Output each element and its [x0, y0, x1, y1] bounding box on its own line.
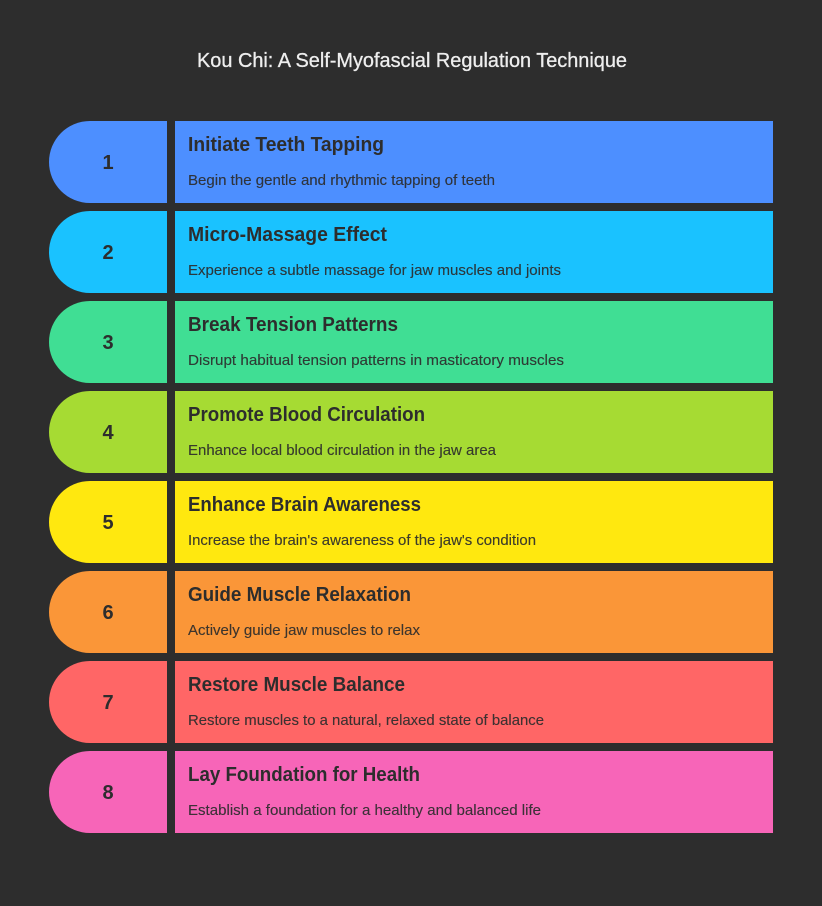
- step 7 description: Restore muscles to a natural, relaxed state of balance: [188, 713, 544, 729]
- step 8 panel: [175, 751, 773, 833]
- step 4 heading: Promote Blood Circulation: [188, 404, 425, 426]
- step 1 number: 1: [102, 152, 114, 174]
- step 8 number: 8: [102, 782, 114, 804]
- step 1: [49, 121, 773, 203]
- step 7 heading: Restore Muscle Balance: [188, 674, 405, 696]
- step 7 number tab: [49, 661, 167, 743]
- step 6 panel: [175, 571, 773, 653]
- step 6 number tab: [49, 571, 167, 653]
- step 8 heading: Lay Foundation for Health: [188, 764, 420, 786]
- step 5 number tab: [49, 481, 167, 563]
- step 3 heading: Break Tension Patterns: [188, 314, 398, 336]
- step 3 number tab: [49, 301, 167, 383]
- step 6 heading: Guide Muscle Relaxation: [188, 584, 411, 606]
- step 8: [49, 751, 773, 833]
- step 2 number tab: [49, 211, 167, 293]
- step 1 number tab: [49, 121, 167, 203]
- step 5 heading: Enhance Brain Awareness: [188, 494, 421, 516]
- title: Kou Chi: A Self-Myofascial Regulation Technique: [197, 50, 627, 72]
- step 3 description: Disrupt habitual tension patterns in masticatory muscles: [188, 353, 564, 369]
- step 6 description: Actively guide jaw muscles to relax: [188, 623, 421, 639]
- step 6: [49, 571, 773, 653]
- step 7 panel: [175, 661, 773, 743]
- step 7 number: 7: [102, 692, 114, 714]
- step 5: [49, 481, 773, 563]
- step 2 number: 2: [102, 242, 114, 264]
- step 5 number: 5: [102, 512, 114, 534]
- step 4: [49, 391, 773, 473]
- step 7: [49, 661, 773, 743]
- step 3 panel: [175, 301, 773, 383]
- step 4 description: Enhance local blood circulation in the jaw area: [188, 443, 497, 459]
- step 2 description: Experience a subtle massage for jaw muscles and joints: [188, 263, 561, 279]
- step 1 panel: [175, 121, 773, 203]
- step 6 number: 6: [102, 602, 114, 624]
- step 5 description: Increase the brain's awareness of the jaw's condition: [188, 533, 536, 549]
- step 3 number: 3: [102, 332, 114, 354]
- step 8 number tab: [49, 751, 167, 833]
- step 2: [49, 211, 773, 293]
- step 4 panel: [175, 391, 773, 473]
- step 4 number tab: [49, 391, 167, 473]
- step 3: [49, 301, 773, 383]
- step 1 heading: Initiate Teeth Tapping: [188, 134, 384, 156]
- step 1 description: Begin the gentle and rhythmic tapping of teeth: [188, 173, 495, 189]
- step 4 number: 4: [102, 422, 114, 444]
- step 2 panel: [175, 211, 773, 293]
- step 2 heading: Micro-Massage Effect: [188, 224, 387, 246]
- step 8 description: Establish a foundation for a healthy and balanced life: [188, 803, 541, 819]
- step 5 panel: [175, 481, 773, 563]
